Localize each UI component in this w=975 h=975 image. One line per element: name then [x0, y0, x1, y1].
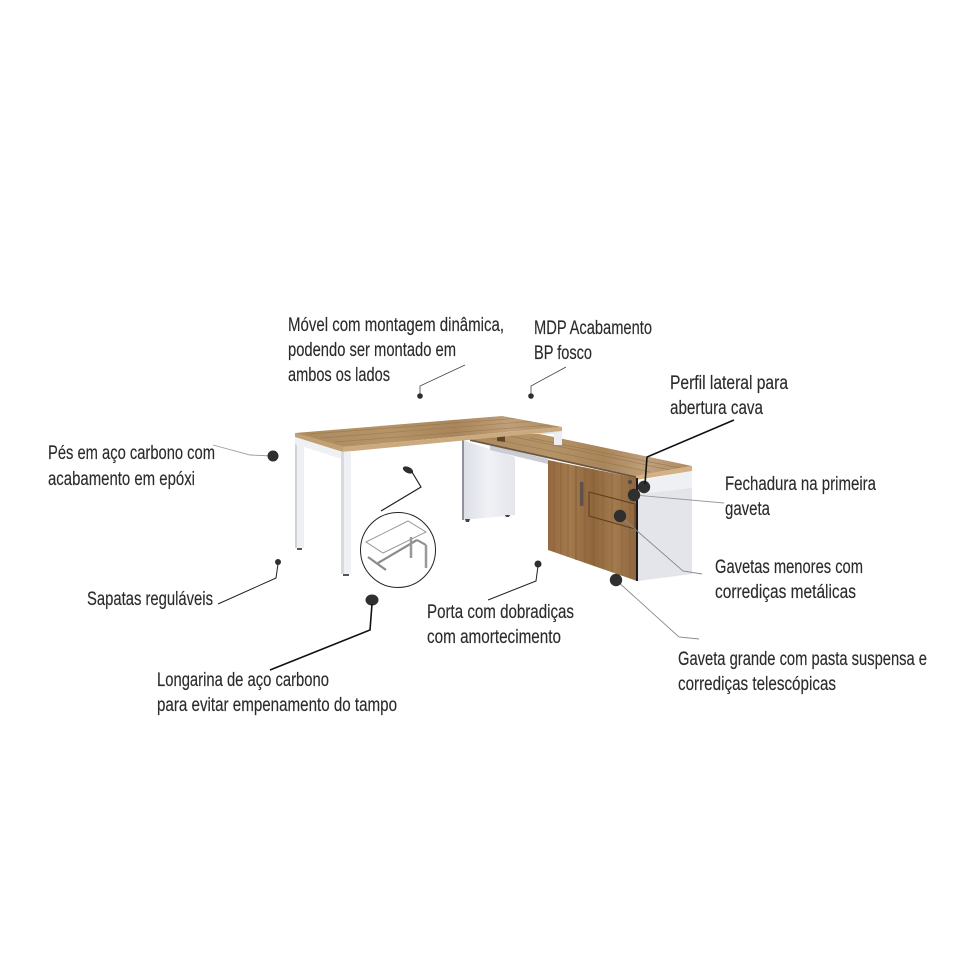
label: adjustable feet: Sapatas reguláveis — [87, 589, 213, 610]
label: side profile: abertura cava — [670, 398, 763, 419]
label: steel stringer: Longarina de aço carbono — [157, 670, 329, 691]
callout marker: MDP finish — [528, 367, 566, 399]
desk: front steel leg — [341, 451, 351, 574]
label: assembly — [288, 315, 504, 386]
callout marker: small drawers — [614, 510, 702, 574]
callout marker: steel stringer — [270, 594, 378, 670]
desk: rear panel leg — [462, 440, 515, 520]
label: assembly: podendo ser montado em — [288, 340, 456, 361]
callout marker: side profile — [638, 420, 734, 493]
label: lock: gaveta — [725, 499, 770, 520]
desk: rear steel leg — [295, 444, 304, 548]
label: steel stringer: para evitar empenamento do tampo — [157, 695, 397, 716]
callout marker: stringer inset — [381, 465, 421, 511]
label: door hinges: com amortecimento — [427, 627, 561, 648]
desk: pedestal side — [638, 471, 692, 581]
desk: small drawer outlines — [589, 492, 635, 529]
illustration: L-shaped desk — [295, 416, 692, 585]
desk: return top surface — [470, 432, 692, 476]
callout marker: door hinges — [488, 560, 542, 600]
label: steel feet: Pés em aço carbono com — [48, 443, 215, 464]
label: assembly: Móvel com montagem dinâmica, — [288, 315, 504, 336]
label: MDP finish: BP fosco — [534, 343, 592, 364]
desk: main top surface — [295, 416, 562, 447]
desk: lock — [628, 480, 632, 484]
label: large drawer — [678, 649, 927, 695]
label: MDP finish: MDP Acabamento — [534, 318, 652, 339]
callout marker: adjustable feet — [218, 559, 281, 604]
desk: cabinet front in wood — [548, 460, 637, 581]
desk: steel frame beam — [295, 437, 342, 459]
callout marker: assembly — [417, 365, 465, 399]
desk: support beam under return — [490, 445, 548, 464]
label: steel feet: acabamento em epóxi — [48, 469, 195, 490]
callout marker: large drawer — [610, 574, 699, 639]
label: steel stringer — [157, 670, 397, 716]
label: assembly: ambos os lados — [288, 365, 390, 386]
label: side profile: Perfil lateral para — [670, 373, 788, 394]
label: lock — [725, 474, 876, 520]
label: small drawers: Gavetas menores com — [715, 557, 863, 578]
label: door hinges: Porta com dobradiças — [427, 602, 574, 623]
callout marker: steel feet — [213, 445, 278, 462]
label: small drawers — [715, 557, 863, 603]
label: door hinges — [427, 602, 574, 648]
label: side profile — [670, 373, 788, 419]
infographic canvas — [48, 316, 926, 716]
label: small drawers: corrediças metálicas — [715, 582, 856, 603]
label: lock: Fechadura na primeira — [725, 474, 876, 495]
inset circle: steel stringer diagram — [360, 512, 436, 588]
desk: door line and handle — [575, 466, 577, 560]
label: steel feet — [48, 443, 215, 490]
label: large drawer: corrediças telescópicas — [678, 674, 836, 695]
callout marker: lock — [628, 489, 724, 503]
label: MDP finish — [534, 318, 652, 364]
desk: connector block and white bracket — [497, 434, 505, 442]
